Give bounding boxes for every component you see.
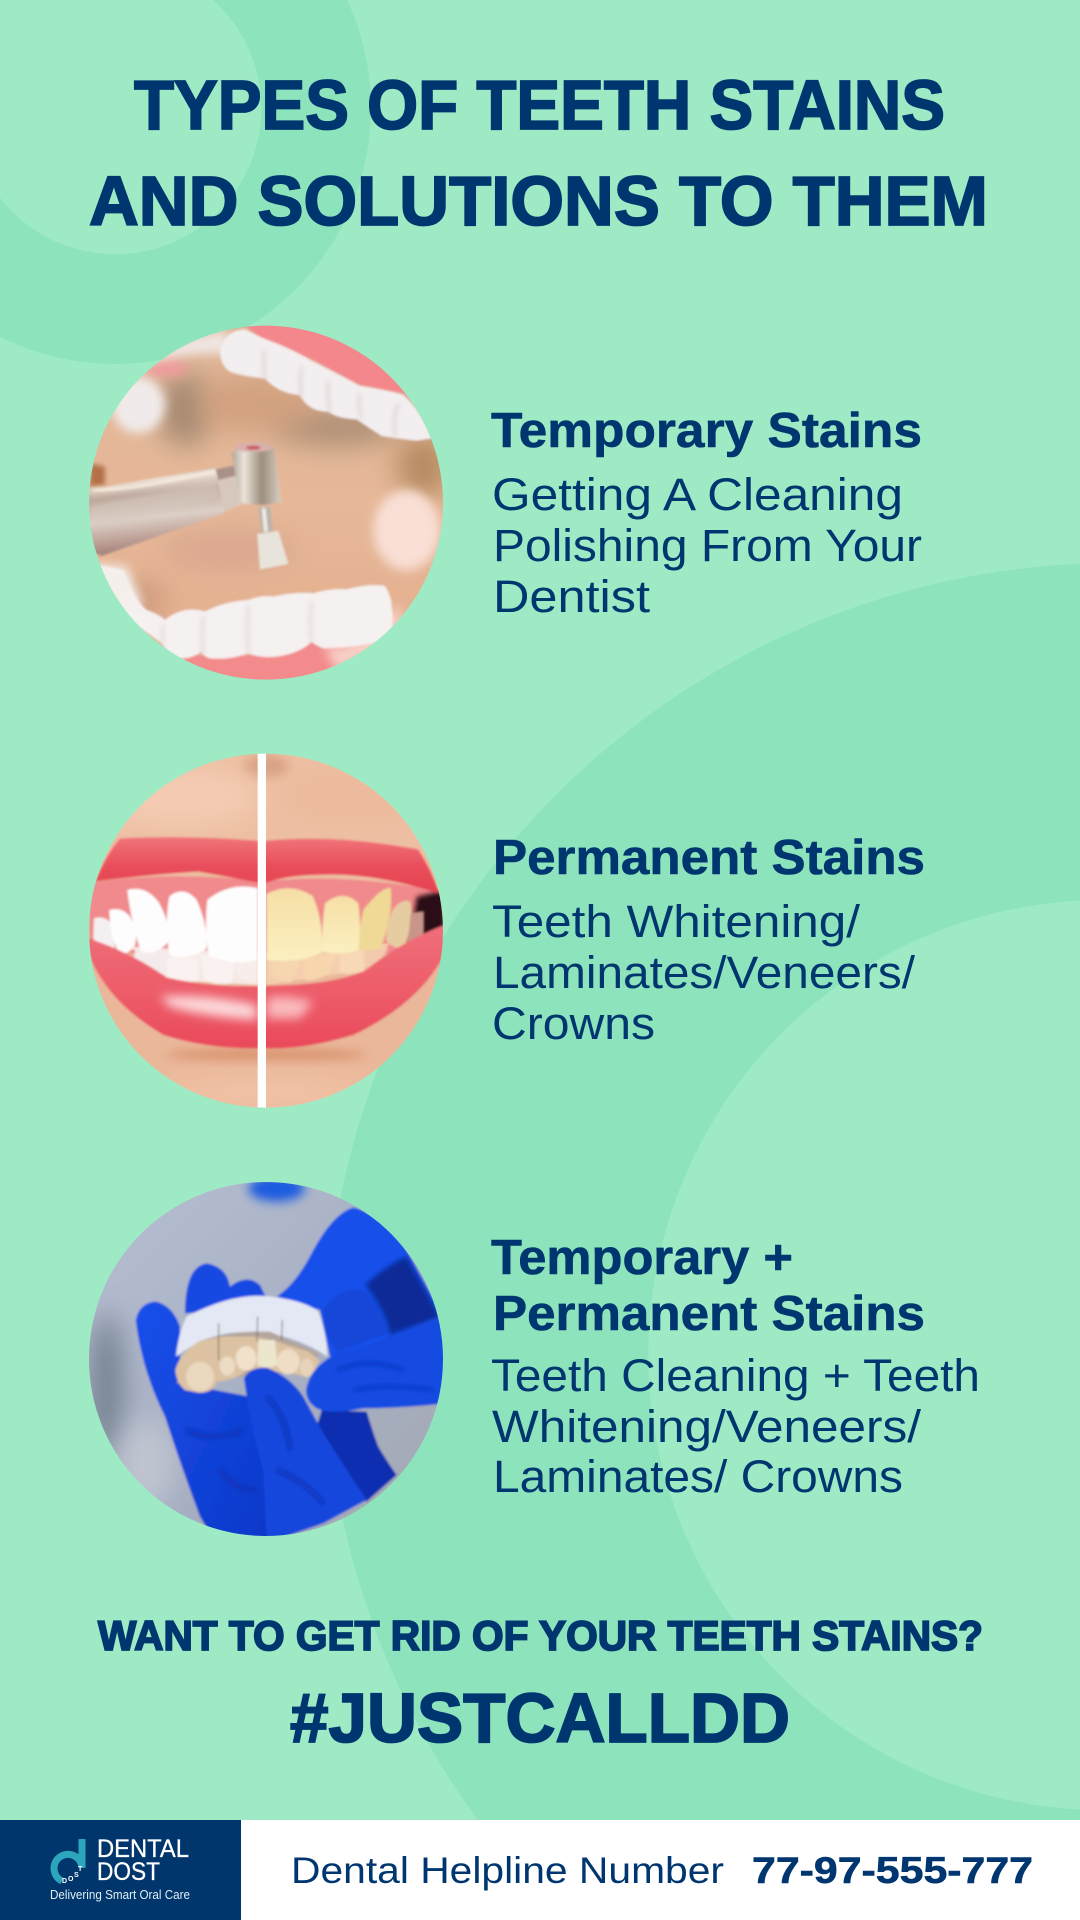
text block: temporary stains: Getting A Cleaning <box>492 469 903 520</box>
icon: d logo mark: D <box>62 1878 67 1885</box>
lower lip <box>88 925 445 1048</box>
icon: d logo mark <box>54 1839 83 1885</box>
text block: temporary plus permanent stains: Whitening/Veneers/ <box>492 1401 922 1452</box>
photo: smile before and after whitening <box>83 750 450 1117</box>
back of lower hand <box>316 1408 398 1502</box>
text block: temporary stains: Temporary Stains <box>491 404 922 458</box>
text block: temporary stains: Dentist <box>493 571 651 622</box>
logo panel: DENTAL <box>97 1835 189 1863</box>
photo: gloved hands holding dental model <box>83 1175 450 1543</box>
left hand <box>136 1302 277 1543</box>
handpiece <box>88 443 288 569</box>
text block: permanent stains: Crowns <box>492 998 655 1049</box>
icon: d logo mark: T <box>78 1866 83 1873</box>
centre thumb <box>244 1368 367 1543</box>
top gum <box>245 326 412 403</box>
text block: permanent stains: Laminates/Veneers/ <box>493 947 916 998</box>
bottom gum <box>182 642 342 680</box>
right index finger <box>306 1317 447 1412</box>
logo panel <box>0 1820 241 1920</box>
text block: permanent stains: Permanent Stains <box>493 831 925 885</box>
title: TYPES OF TEETH STAINS <box>134 66 945 144</box>
text block: temporary plus permanent stains <box>491 1231 980 1502</box>
text block: temporary stains: Polishing From Your <box>493 520 922 571</box>
footer bar <box>0 1820 1080 1920</box>
upper lip <box>95 837 439 893</box>
helpline label: Dental Helpline Number <box>291 1850 724 1891</box>
text block: temporary plus permanent stains: Teeth Cleaning + Teeth <box>491 1350 980 1401</box>
icon: d logo mark: O <box>68 1876 74 1883</box>
divider bar <box>258 750 266 1113</box>
text block: temporary plus permanent stains: Temporary + <box>491 1231 793 1285</box>
text block: temporary plus permanent stains: Permanent Stains <box>493 1287 925 1341</box>
lower teeth base <box>130 947 258 985</box>
text block: temporary stains <box>491 404 922 622</box>
bottom teeth <box>90 563 393 659</box>
helpline number: 77-97-555-777 <box>752 1850 1033 1891</box>
mouth interior <box>88 876 445 953</box>
icon: d logo mark: S <box>74 1872 79 1879</box>
hashtag: #JUSTCALLDD <box>290 1679 790 1757</box>
white teeth <box>93 887 258 984</box>
text block: permanent stains: Teeth Whitening/ <box>492 896 861 947</box>
title: AND SOLUTIONS TO THEM <box>89 162 988 240</box>
dental model strip <box>175 1296 327 1393</box>
photo: dental polishing tool in mouth <box>83 320 450 687</box>
yellow teeth <box>267 887 423 983</box>
logo panel: Delivering Smart Oral Care <box>50 1887 190 1902</box>
top teeth <box>220 329 432 441</box>
back fingers <box>185 1263 267 1313</box>
text block: temporary plus permanent stains: Laminates/ Crowns <box>493 1451 903 1502</box>
title <box>89 66 988 240</box>
call to action question: WANT TO GET RID OF YOUR TEETH STAINS? <box>98 1612 983 1659</box>
upper right hand <box>277 1207 443 1357</box>
logo panel: DOST <box>97 1858 160 1886</box>
text block: permanent stains <box>492 831 925 1049</box>
